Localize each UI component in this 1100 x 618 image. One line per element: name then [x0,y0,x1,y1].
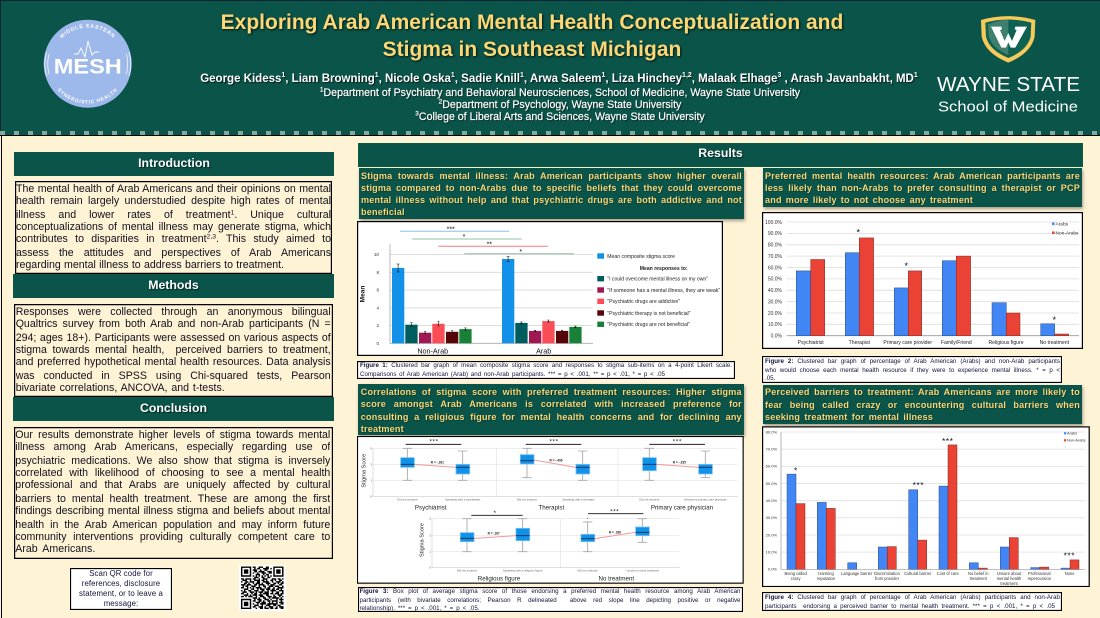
affiliations [320,86,801,124]
axis labels: 90.0% [768,231,783,237]
axis labels: 10.0% [766,550,777,554]
heading: Methods [13,274,334,298]
caption: figure 2: Figure 2: Clustered bar graph of percentage of Arab American (Arabs) and non-Arab participants [765,358,1060,364]
category labels: crazy [791,576,802,581]
category labels: Therapist [849,340,871,346]
axis labels: 50.0% [768,277,783,283]
subheading: correlations of stigma score: Correlations of stigma score with preferred treatment resources: Higher stigma [361,387,742,397]
logo: MESH [44,20,132,108]
text block: methods: bivariate correlations, ANCOVA, and t-tests. [16,382,225,394]
axis labels: 100.0% [765,220,783,226]
correlation labels: R = .167 [488,532,500,536]
category labels: Unsure about [997,571,1022,576]
axis labels: 60.0% [766,464,777,469]
chart: figure 3 box plots: *** [430,439,439,446]
chart: figure 3 box plots: 1 [430,550,432,554]
category labels: repercussion [1028,576,1052,581]
chart: figure 3 box plots: * [494,510,497,517]
chart: figure 3 box plots: *** [673,438,682,445]
significance brackets: ** [487,242,492,248]
text block: introduction: illness and lower rates of treatment1. Unique cultural [16,209,331,221]
axis labels: 80.0% [766,429,777,434]
heading: Conclusion [13,397,334,421]
chart: figure 3 box plots: 5 [430,517,432,521]
logo: MESH: MIDDLE EASTERN [60,24,115,38]
category labels: Primary care provider [883,340,932,346]
chart: figure 1 clustered bar graph: 10 [374,252,379,257]
legend: Non-Arabs [1067,438,1086,443]
axis labels [766,429,777,572]
caption: figure 1: Figure 1: Clustered bar graph of mean composite stigma score and responses to stigma sub-items on a 4-point Likert scale. [360,362,732,369]
text block: introduction [14,181,332,274]
category tick labels [398,497,728,572]
text block: conclusion [14,427,333,559]
subheading: stigma towards mental illness: beneficial [361,207,405,217]
boxes [401,455,713,542]
subheading: correlations of stigma score [358,384,744,435]
axis titles: Stigma Score [420,523,426,557]
axis labels: 30.0% [766,515,777,520]
bars: Arabs [796,253,1055,336]
subheading: preferred mental health resources: Preferred mental health resources: Arab American participants are [765,171,1080,181]
authors: George Kidess1, Liam Browning1, Nicole Oska1, Sadie Knill1, Arwa Saleem1, Liza Hinchey1,2, Malaak Elhage3 , Arash Javanbakht, MD1 [200,72,918,85]
category labels: Harming [818,571,834,576]
correlation labels [431,459,686,536]
logo: MESH: SYNERGISTIC HEALTH [58,88,117,104]
category labels: Being called [785,571,808,576]
significance stars: *** [942,436,954,446]
legend: "Psychiatric therapy is not beneficial" [607,311,691,317]
subheading: perceived barriers to treatment: seeking treatment for mental illness [765,412,933,422]
bars: Non-Arabs [811,238,1069,336]
axis labels: 60.0% [768,265,783,271]
text block: conclusion: health in the Arab American population and may inform future [15,519,330,531]
category labels [785,571,1075,586]
axis labels: 20.0% [768,311,783,317]
subheading: correlations of stigma score: consulting a religious figure for mental health concerns and for declining any [361,412,742,422]
chart: figure 1 clustered bar graph: 8 [376,270,379,275]
category labels: treatment [1000,581,1019,586]
caption: figure 3: Figure 3: Box plot of average stigma score of those endorsing a preferred mental health resource among Arab American [360,588,740,595]
axis labels: 10.0% [768,322,783,328]
chart: figure 1 clustered bar graph: Arab [536,347,551,356]
significance brackets [400,226,574,256]
significance stars: *** [913,480,924,490]
heading: Introduction: Introduction [138,156,210,170]
category tick labels: Did not endorse [640,497,660,501]
correlation labels: R = -.261 [431,460,444,464]
significance stars [794,436,1075,561]
chart: figure 3 box plots: 3 [371,462,373,466]
category labels: Cultural barrier [904,571,932,576]
QR code note: references, disclosure [82,579,160,588]
category labels: reputation [817,576,836,581]
text block: methods [14,304,333,397]
panel titles [415,504,714,582]
category tick labels: Did not endorse [578,568,598,572]
chart: figure 3 box plots [357,436,744,584]
text block: introduction: assess the attitudes and perspectives of Arab Americans [16,247,331,259]
bars: non-Arab [392,264,472,343]
axis titles [362,454,426,557]
significance brackets: * [519,249,522,256]
category tick labels: Did not endorse [457,568,478,572]
panel titles: No treatment [599,575,635,582]
category labels: No belief in [968,571,989,576]
affiliations: 1Department of Psychiatry and Behavioral Neurosciences, School of Medicine, Wayne State University [320,86,800,99]
text block: methods: Qualtrics survey from both Arab and non-Arab participants (N = [16,318,331,330]
bars: Non-Arabs [796,445,1079,569]
text block: introduction: regarding mental illness to address barriers to treatment. [16,259,284,271]
subheading: stigma towards mental illness [359,168,744,219]
text block: introduction: health remain largely understudied despite high rates of mental [16,195,331,207]
chart: figure 1 clustered bar graph: 0 [376,341,379,346]
panel titles: Primary care physician [651,504,714,511]
affiliations: 3College of Liberal Arts and Sciences, Wayne State University [415,110,705,123]
chart: figure 1 clustered bar graph: 2 [376,323,379,328]
significance brackets: *** [447,226,455,234]
caption: figure 2: .05. [765,374,775,382]
text block: methods: was conducted in SPSS using Chi-squared tests, Pearson [16,370,331,382]
axis labels: 80.0% [768,243,783,249]
bars: Arab [502,256,582,343]
chart: figure 3 box plots: *** [550,438,559,445]
legend: Non-Arabs [1056,230,1079,236]
chart: figure 3 box plots: 1 [371,478,373,482]
logo: MESH: MESH [54,56,122,79]
legend [597,253,720,328]
legend: "I could overcome mental illness on my own" [607,276,708,282]
significance stars: * [1053,315,1057,325]
subheading: preferred mental health resources: and more likely to not choose any treatment [765,195,973,205]
text block: methods: Responses were collected through an anonymous bilingual [16,306,331,318]
axis labels: 70.0% [768,254,783,260]
subheading: stigma towards mental illness: stigma compared to non-Arabs due to specific beliefs that they could overcome [361,183,742,193]
axis labels: 0.0% [771,334,783,340]
correlation labels: R = -.335 [673,460,686,464]
chart: figure 4 clustered bar graph [762,426,1090,587]
category tick labels: Speaking with a religious figure [503,568,543,572]
chart: figure 1 clustered bar graph: Mean [360,286,366,302]
bars: Arabs [787,474,1070,569]
category labels: Language barrier [841,571,873,576]
whiskers [403,448,710,552]
category labels: from provider [875,576,900,581]
legend [1064,431,1086,443]
category tick labels: Did not endorse [517,497,538,501]
category labels: mental health [997,576,1022,581]
correlation labels: R = -.406 [550,459,563,463]
category labels: Religious figure [988,340,1024,346]
logo: Wayne State School of Medicine: WAYNE STATE [937,74,1080,96]
category tick labels: Speaking with a psychiatrist [445,497,481,501]
panel titles: Religious figure [478,575,521,582]
category labels: Psychiatrist [798,340,824,346]
chart: figure 3 box plots: 0 [371,495,373,499]
text block: introduction: contributes to disparities in treatment2,3. This study aimed to [16,233,331,245]
text block: methods: 294; ages 18+). Participants were assessed on various aspects of [16,332,331,344]
significance stars: * [905,261,909,271]
logo: Wayne State School of Medicine [937,16,1080,116]
text block: methods: stigma towards mental health, perceived barriers to treatment, [16,344,331,356]
legend: "If someone has a mental illness, they are weak" [607,288,720,294]
caption: figure 4: Figure 4: Clustered bar graph of percentage of Arab American (Arabs) participants and non-Arab [765,594,1060,601]
chart: figure 1 clustered bar graph [357,221,723,356]
heading: Results [358,143,1083,167]
caption: figure 1: Comparisons of Arab American (Arab) and non-Arab participants. *** = p < .001, ** = p < .01, * = p < .05 [360,371,665,378]
header banner [0,0,1100,135]
axis labels: 70.0% [766,447,777,452]
caption: figure 4 [762,592,1062,611]
category tick labels: Seeing my primary care physician [684,497,728,501]
chart: figure 3 box plots: 3 [430,534,432,538]
text block: conclusion: community interventions providing culturally competent care to [15,531,330,543]
caption: figure 3 [358,587,743,612]
slope lines [415,460,699,539]
significance stars: * [794,466,798,476]
QR code note [70,568,172,610]
caption: figure 2 [762,356,1062,383]
subheading: stigma towards mental illness: mental illness without help and that psychiatric drugs are both addictive and not [361,195,742,205]
medians [401,461,713,539]
caption: figure 3: relationship). *** = p < .001, * = p < .05. [360,605,480,612]
chart: figure 2 clustered bar graph [762,212,1083,349]
title [221,11,844,62]
chart: figure 1 clustered bar graph: 6 [376,288,379,293]
category tick labels: Speaking with a therapist [563,497,595,501]
category tick labels: I would not seek treatment [626,568,660,572]
title: Exploring Arab American Mental Health Conceptualization and [221,11,843,34]
subheading: correlations of stigma score: treatment [361,424,404,434]
legend: "Psychiatric drugs are not beneficial" [607,322,690,328]
category labels [798,340,1070,346]
heading: Results: Results [698,146,743,160]
heading: Introduction [14,152,334,176]
text block: introduction: The mental health of Arab Americans and their opinions on mental [16,183,331,195]
significance brackets: * [463,234,466,241]
caption: figure 1 [357,361,735,379]
chart: figure 3 box plots: *** [610,508,620,515]
caption: figure 2: who would choose each mental health resource if they were to experience mental illness. * = p < [765,366,1060,374]
text block: conclusion: professional and that Arabs are uniquely affected by cultural [15,479,330,491]
subheading: correlations of stigma score: score amongst Arab Americans is correlated with increased preference for [361,399,742,409]
axis labels [765,220,783,340]
category labels: Family/Friend [941,340,972,346]
subheading: perceived barriers to treatment: fear being called crazy or encountering cultural barriers when [765,400,1080,410]
subheading: perceived barriers to treatment [763,385,1082,424]
legend: Mean responses to: [640,266,688,272]
QR code note: statement, or to leave a [79,589,163,598]
axis labels: 40.0% [766,498,777,503]
QR code note: Scan QR code for [89,568,153,578]
text block: introduction: conceptualizations of mental illness may generate stigma, which [16,221,331,233]
significance bars [406,443,705,446]
subheading: perceived barriers to treatment: Perceived barriers to treatment: Arab Americans are more likely to [765,387,1080,397]
category labels: No treatment [1040,340,1070,346]
chart: figure 1 clustered bar graph: 4 [376,305,379,310]
logo: Wayne State School of Medicine: School of Medicine [938,98,1078,116]
text block: conclusion: findings describing mental illness stigma and beliefs about mental [15,505,330,517]
text block: conclusion: illness among Arab Americans, especially regarding use of [15,441,330,453]
category labels: treatment [970,576,988,581]
category tick labels: Did not endorse [398,497,418,501]
heading: Methods: Methods [148,278,199,292]
axis labels: 20.0% [766,532,777,537]
title: Stigma in Southeast Michigan [383,38,681,61]
caption: figure 3: participants (with bivariate correlations; Pearson R delineated above red slope line depicting positive or negative [360,597,740,604]
QR code note: message: [104,599,138,608]
heading: Conclusion: Conclusion [140,401,207,415]
legend: Mean composite stigma score [607,254,675,260]
correlation labels: R = .280 [609,530,622,534]
significance stars [857,228,1057,325]
legend: Arabs [1056,222,1069,228]
axis labels: 40.0% [768,288,783,294]
legend [1052,222,1079,236]
legend: "Psychiatric drugs are addictive" [607,299,680,305]
caption: figure 4: participants endorsing a perceived barrier to mental health treatment. *** = p < .001, * = p < .05 [765,603,1055,610]
text block: conclusion: barriers to mental health treatment. These are among the first [15,493,330,505]
axis titles: Stigma Score [362,454,368,488]
category labels: None [1065,571,1075,576]
text block: methods: and preferred hypothetical mental health resources. Data analysis [16,356,331,368]
chart: figure 1 clustered bar graph: Non-Arab [417,347,448,356]
text block: conclusion: Our results demonstrate higher levels of stigma towards mental [15,429,330,441]
panel titles: Therapist [539,504,565,511]
axis labels: 0.0% [768,567,777,572]
category labels: Professional [1028,571,1051,576]
legend: Arabs [1067,431,1077,436]
chart: figure 3 box plots: 0 [430,566,432,570]
subheading: preferred mental health resources [763,168,1082,207]
text block: conclusion: psychiatric medications. We also show that stigma is inversely [15,455,330,467]
category labels: Cost of care [937,571,959,576]
subheading: preferred mental health resources: less likely than non-Arabs to prefer consulting a therapist or PCP [765,183,1080,193]
significance stars: * [857,228,861,238]
subheading: stigma towards mental illness: Stigma towards mental illness: Arab American participants show higher overall [361,171,742,181]
chart: figure 3 box plots: 5 [371,446,373,450]
text block: conclusion: correlated with likelihood of choosing to see a mental health [15,467,330,479]
affiliations: 2Department of Psychology, Wayne State University [439,98,681,111]
category labels: Discrimination [874,571,901,576]
axis labels: 50.0% [766,481,777,486]
significance stars: *** [1064,551,1075,561]
text block: conclusion: Arab Americans. [15,543,95,555]
panel titles: Psychiatrist [415,504,447,511]
axis labels: 30.0% [768,299,783,305]
QR code [239,565,286,610]
